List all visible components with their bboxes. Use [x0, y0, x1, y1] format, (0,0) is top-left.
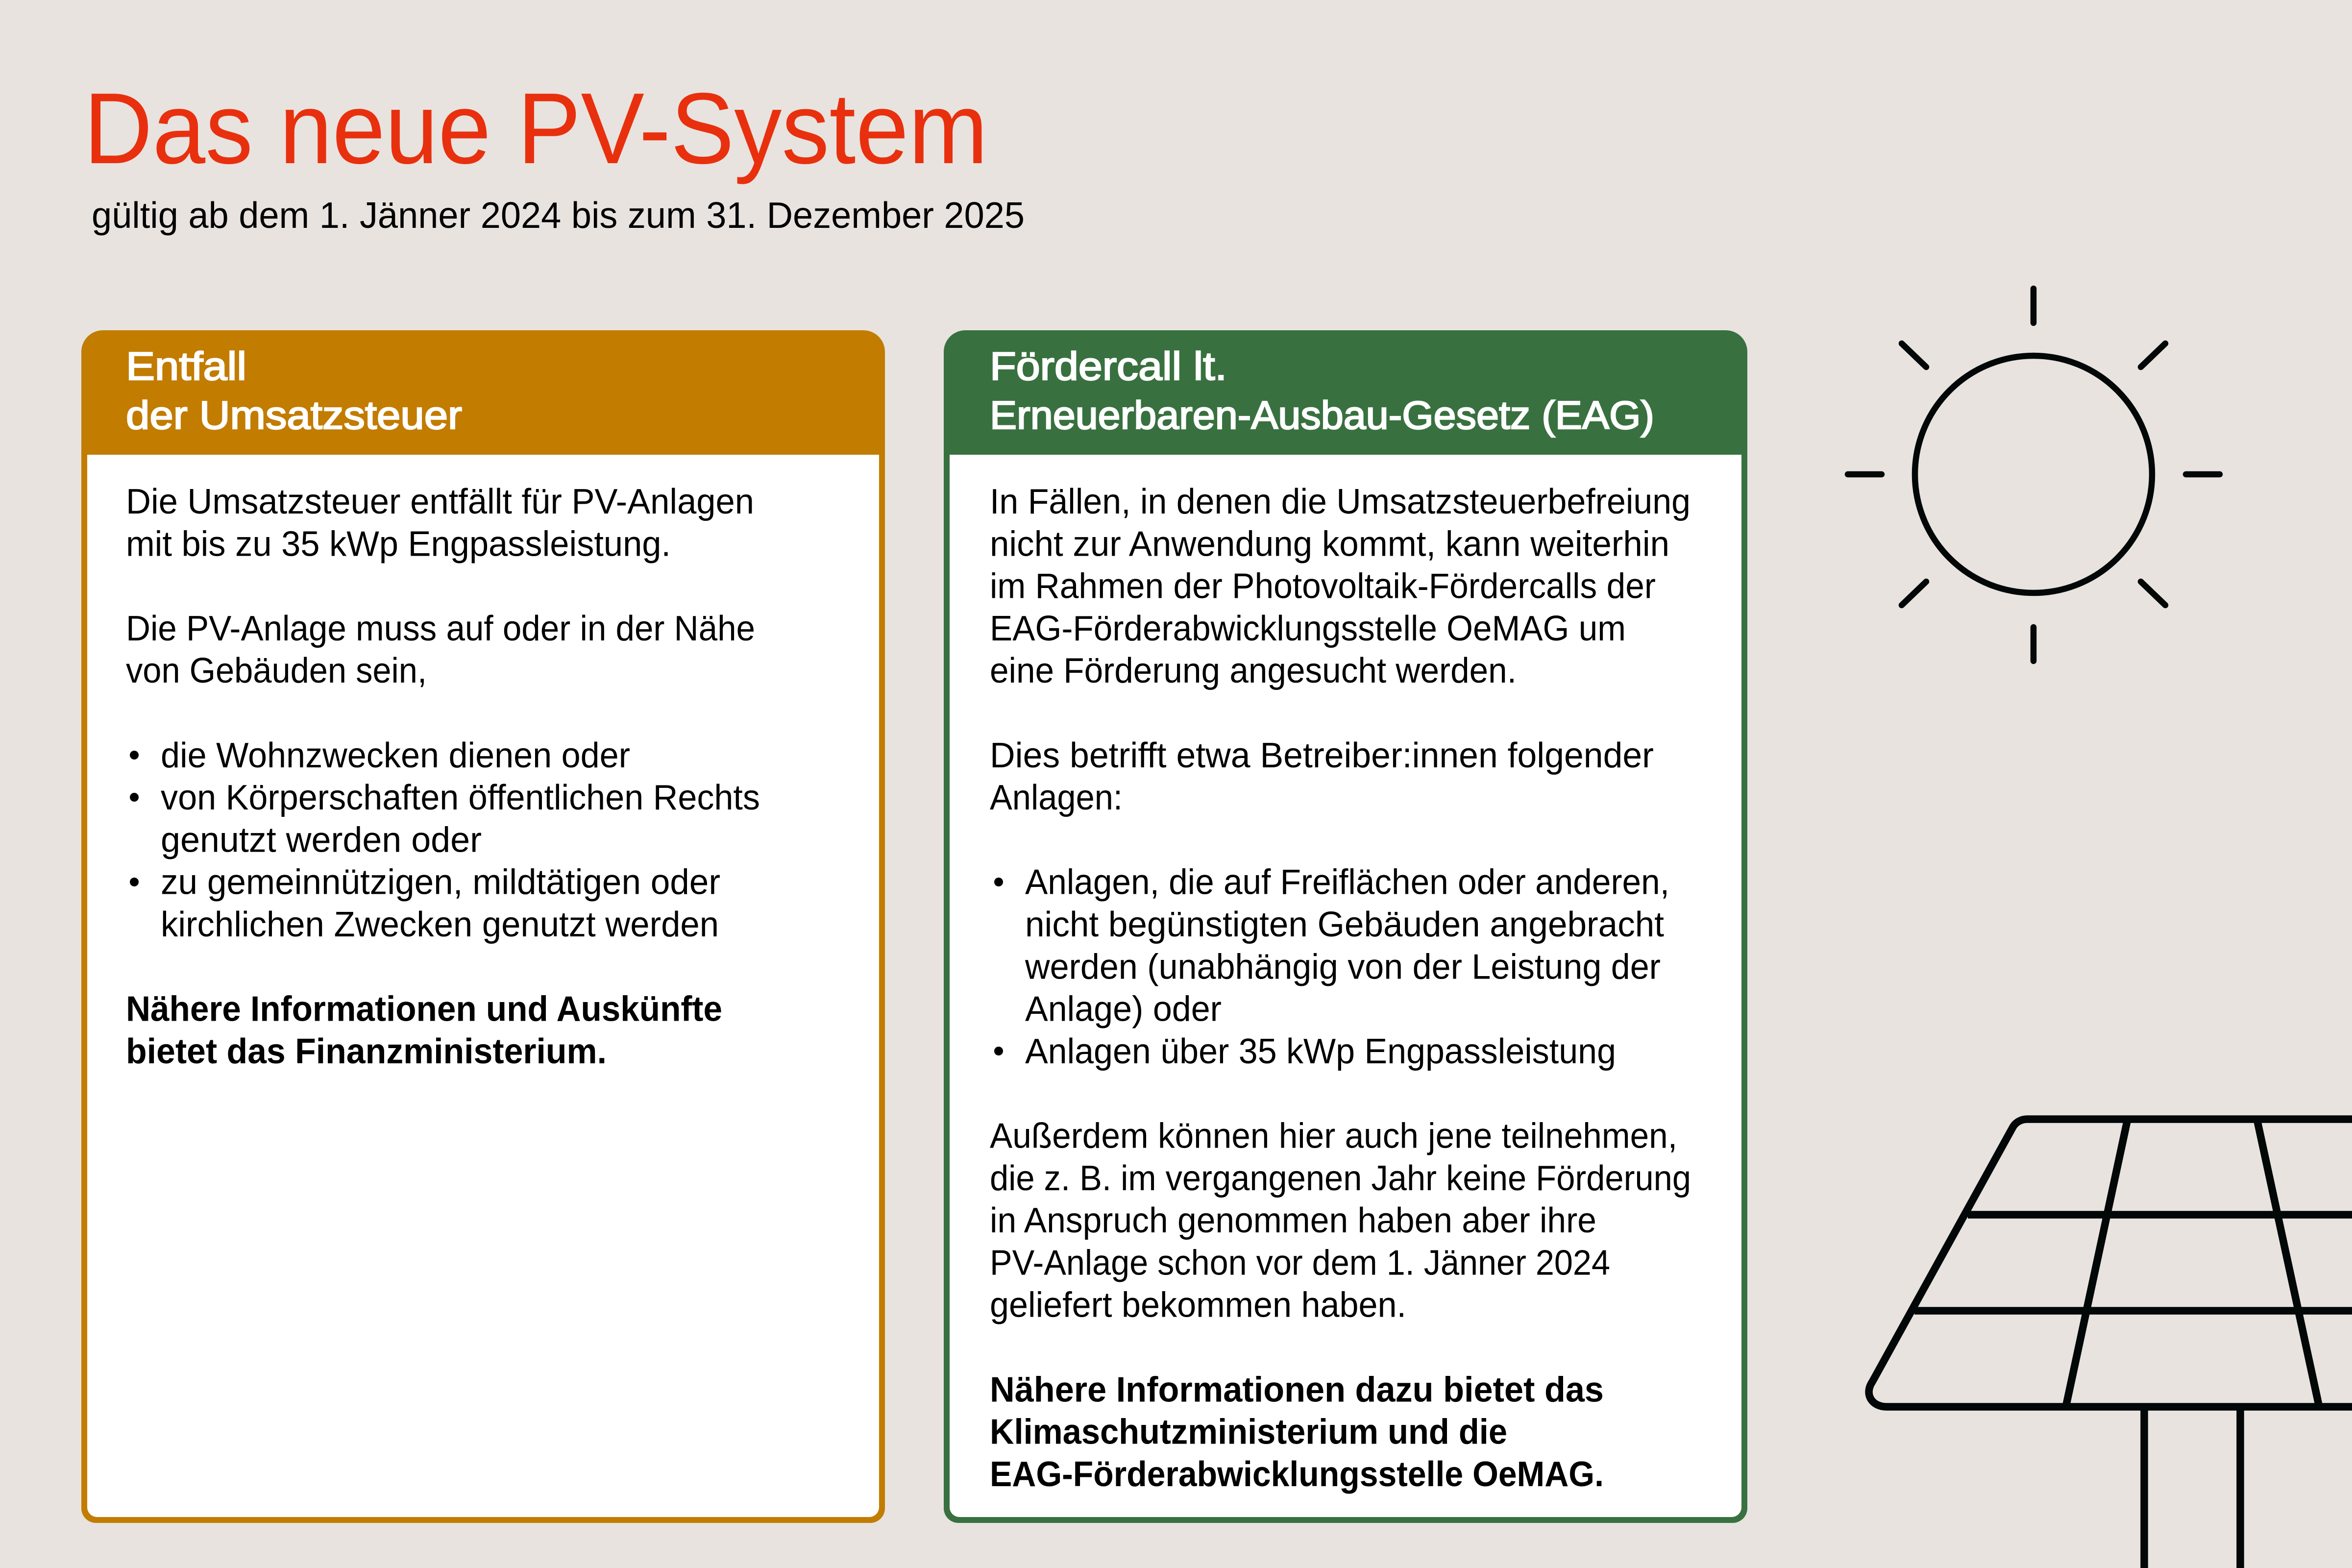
icon: sun	[1848, 289, 2220, 661]
bold note: Nähere Informationen dazu bietet das	[990, 1370, 1604, 1409]
text block: Außerdem: die z. B. im vergangenen Jahr keine Förderung	[990, 1159, 1691, 1198]
bullet list: Anlagen über 35 kWp Engpassleistung	[1025, 1032, 1616, 1071]
text block: intro: EAG-Förderabwicklungsstelle OeMAG um	[990, 609, 1626, 648]
text block: intro	[990, 482, 1690, 817]
text block: Außerdem	[990, 1116, 1691, 1325]
bold note: Klimaschutzministerium und die	[990, 1413, 1507, 1452]
bullet list: genutzt werden oder	[161, 820, 482, 859]
bullet list: werden (unabhängig von der Leistung der	[1025, 947, 1661, 986]
text block: intro	[126, 482, 755, 690]
panel: Entfall der Umsatzsteuer	[81, 330, 885, 1523]
bold note: EAG-Förderabwicklungsstelle OeMAG.	[990, 1455, 1604, 1494]
bullet list: Anlagen, die auf Freiflächen oder anderen,	[1025, 863, 1669, 902]
bold note: Nähere Informationen und Auskünfte	[126, 990, 722, 1029]
bullet list: Anlage) oder	[1025, 990, 1222, 1029]
text block: intro: Die Umsatzsteuer entfällt für PV-Anlagen	[126, 482, 754, 521]
title: Das neue PV-System	[84, 72, 988, 185]
text block: intro: In Fällen, in denen die Umsatzsteuerbefreiung	[990, 482, 1690, 521]
heading: Fördercall lt. Erneuerbaren-Ausbau-Gesetz (EAG): Erneuerbaren-Ausbau-Gesetz (EAG)	[990, 393, 1654, 438]
text block: intro: im Rahmen der Photovoltaik-Fördercalls der	[990, 567, 1656, 606]
text block: Außerdem: geliefert bekommen haben.	[990, 1286, 1406, 1325]
heading: Fördercall lt. Erneuerbaren-Ausbau-Gesetz (EAG): Fördercall lt.	[990, 344, 1227, 389]
text block: intro: Dies betrifft etwa Betreiber:innen folgender	[990, 736, 1654, 775]
heading: Fördercall lt. Erneuerbaren-Ausbau-Gesetz (EAG)	[990, 344, 1654, 438]
text block: Außerdem: in Anspruch genommen haben aber ihre	[990, 1201, 1596, 1240]
bullet list	[130, 736, 760, 944]
bold note	[990, 1370, 1604, 1494]
text block: Außerdem: Außerdem können hier auch jene teilnehmen,	[990, 1116, 1677, 1155]
bullet list: nicht begünstigten Gebäuden angebracht	[1025, 905, 1664, 944]
text block: intro: von Gebäuden sein,	[126, 651, 427, 690]
bullet list: von Körperschaften öffentlichen Rechts	[161, 778, 760, 817]
text block: intro: Die PV-Anlage muss auf oder in der Nähe	[126, 609, 755, 648]
bullet list	[994, 863, 1669, 1071]
heading: Entfall der Umsatzsteuer: der Umsatzsteuer	[126, 393, 462, 438]
text block: intro: mit bis zu 35 kWp Engpassleistung.	[126, 524, 671, 564]
icon: solar panel	[1869, 1119, 2352, 1568]
text block: intro: nicht zur Anwendung kommt, kann weiterhin	[990, 524, 1669, 564]
bullet list: kirchlichen Zwecken genutzt werden	[161, 905, 719, 944]
bullet list: zu gemeinnützigen, mildtätigen oder	[161, 863, 720, 902]
subtitle: gültig ab dem 1. Jänner 2024 bis zum 31. Dezember 2025	[92, 195, 1025, 236]
heading: Entfall der Umsatzsteuer	[126, 344, 462, 438]
text block: intro: Anlagen:	[990, 778, 1123, 817]
bold note	[126, 990, 722, 1071]
bold note: bietet das Finanzministerium.	[126, 1032, 607, 1071]
panel: Fördercall lt. EAG	[944, 330, 1747, 1523]
bullet list: die Wohnzwecken dienen oder	[161, 736, 630, 775]
text block: Außerdem: PV-Anlage schon vor dem 1. Jänner 2024	[990, 1243, 1610, 1282]
text block: intro: eine Förderung angesucht werden.	[990, 651, 1517, 690]
heading: Entfall der Umsatzsteuer: Entfall	[126, 344, 246, 389]
